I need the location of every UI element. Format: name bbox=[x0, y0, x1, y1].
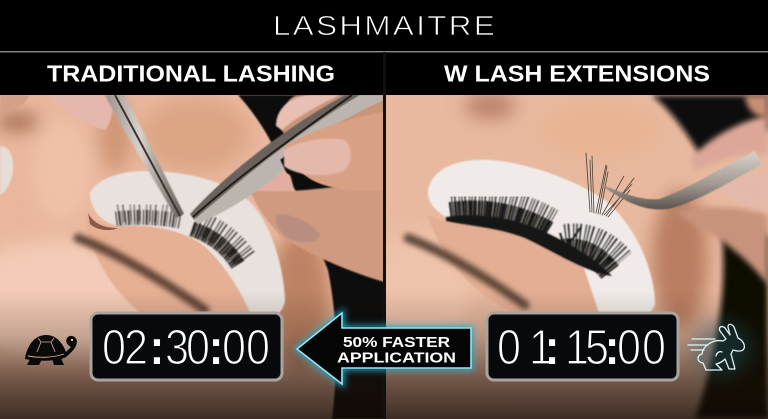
rabbit glow backdrop bbox=[692, 320, 752, 376]
left eye patch fragment bbox=[0, 146, 13, 195]
panel: W lash extensions photo bbox=[370, 93, 768, 419]
timer: traditional bbox=[91, 313, 282, 380]
hand bottom finger bbox=[675, 207, 768, 285]
icon: turtle bbox=[25, 335, 77, 365]
lower nail bbox=[276, 214, 320, 242]
eyebrow bbox=[78, 238, 205, 310]
arrow text line one: 50% FASTER bbox=[343, 335, 451, 351]
timer value 01:15:00: 01:15:00 bbox=[497, 319, 666, 375]
hand top fleck bbox=[745, 95, 768, 118]
eyelid bbox=[428, 215, 600, 316]
skin base bbox=[386, 95, 768, 419]
lashes bbox=[116, 210, 246, 265]
arrow glow bbox=[297, 313, 471, 384]
timer value 02:30:00: 02:30:00 bbox=[102, 319, 270, 375]
skin tone shading bbox=[0, 97, 330, 370]
fan lash bundle bbox=[586, 153, 634, 217]
dark hair background lower right bbox=[695, 235, 768, 419]
right tweezers lower arm bbox=[194, 95, 384, 224]
finger shadow top left bbox=[0, 95, 30, 110]
hand lower finger bbox=[722, 174, 767, 210]
arrow text line two: APPLICATION bbox=[337, 350, 456, 366]
dark hair background upper right bbox=[652, 95, 768, 155]
volume lashes bbox=[450, 204, 618, 272]
dark hair background bbox=[238, 95, 384, 419]
skin base bbox=[0, 95, 383, 419]
left tweezers bbox=[105, 95, 184, 218]
timer: W lash bbox=[487, 313, 678, 380]
main nail bbox=[284, 138, 351, 175]
right hand upper finger bbox=[279, 95, 383, 134]
lash band bbox=[446, 215, 612, 276]
logo: LASHMAITRE: LASHMAITRE bbox=[273, 11, 495, 42]
heading: traditional lashing: TRADITIONAL LASHING bbox=[47, 60, 335, 86]
panel: traditional lashing photo bbox=[0, 95, 384, 419]
lower finger bbox=[232, 161, 294, 190]
inner eye corner bbox=[88, 213, 118, 230]
left tweezers centre shadow bbox=[115, 95, 180, 216]
lower hand bbox=[250, 182, 384, 282]
panel divider bbox=[383, 52, 386, 419]
timer frame bbox=[487, 313, 678, 380]
right tweezers upper arm bbox=[190, 95, 360, 220]
skin tone shading bbox=[370, 93, 708, 350]
eyebrow bbox=[408, 238, 525, 305]
bottom fade bbox=[0, 290, 384, 419]
under-eye gel patch bbox=[90, 171, 285, 315]
hand upper finger bbox=[690, 115, 768, 170]
bottom fade bbox=[386, 290, 768, 419]
top finger and nail bbox=[48, 95, 113, 130]
callout arrow: 50% faster application bbox=[297, 313, 471, 384]
under-eye gel patch bbox=[428, 160, 655, 316]
header band bbox=[0, 0, 768, 95]
eyelid bbox=[86, 217, 246, 312]
upper nail bbox=[276, 95, 340, 130]
arrow body bbox=[297, 313, 471, 384]
timer frame bbox=[91, 313, 282, 380]
header divider line bbox=[0, 51, 768, 52]
right hand main finger bbox=[284, 112, 384, 191]
icon: running rabbit bbox=[688, 324, 744, 370]
right tweezers centre shadow bbox=[193, 95, 352, 217]
heading: W lash extensions: W LASH EXTENSIONS bbox=[444, 60, 710, 86]
tweezers bbox=[598, 151, 762, 209]
